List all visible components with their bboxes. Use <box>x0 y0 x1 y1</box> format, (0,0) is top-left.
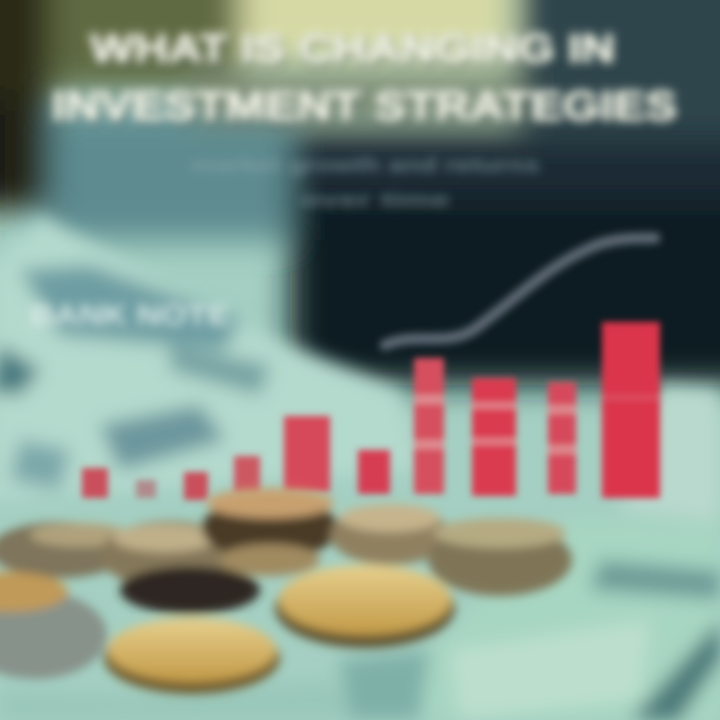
bar chart: red bars <box>82 322 660 500</box>
coin stacks <box>0 522 130 578</box>
note label: BANK NOTE <box>30 299 230 332</box>
title shadow <box>54 31 679 133</box>
coins <box>0 488 572 694</box>
bar highlight bands <box>414 395 660 454</box>
front coins <box>275 568 455 648</box>
subtitle text <box>190 155 540 210</box>
line chart <box>385 238 655 345</box>
title text: INVESTMENT STRATEGIES <box>52 82 677 129</box>
title shadow: WHAT IS CHANGING IN <box>92 31 617 75</box>
subtitle text: over time <box>300 190 450 210</box>
title text: WHAT IS CHANGING IN <box>90 27 615 71</box>
title text <box>52 27 677 129</box>
background: dark upper scene <box>0 0 720 385</box>
subtitle text: market growth and returns <box>190 155 540 177</box>
title shadow: INVESTMENT STRATEGIES <box>54 86 679 133</box>
banknotes: pale green paper <box>0 215 720 720</box>
